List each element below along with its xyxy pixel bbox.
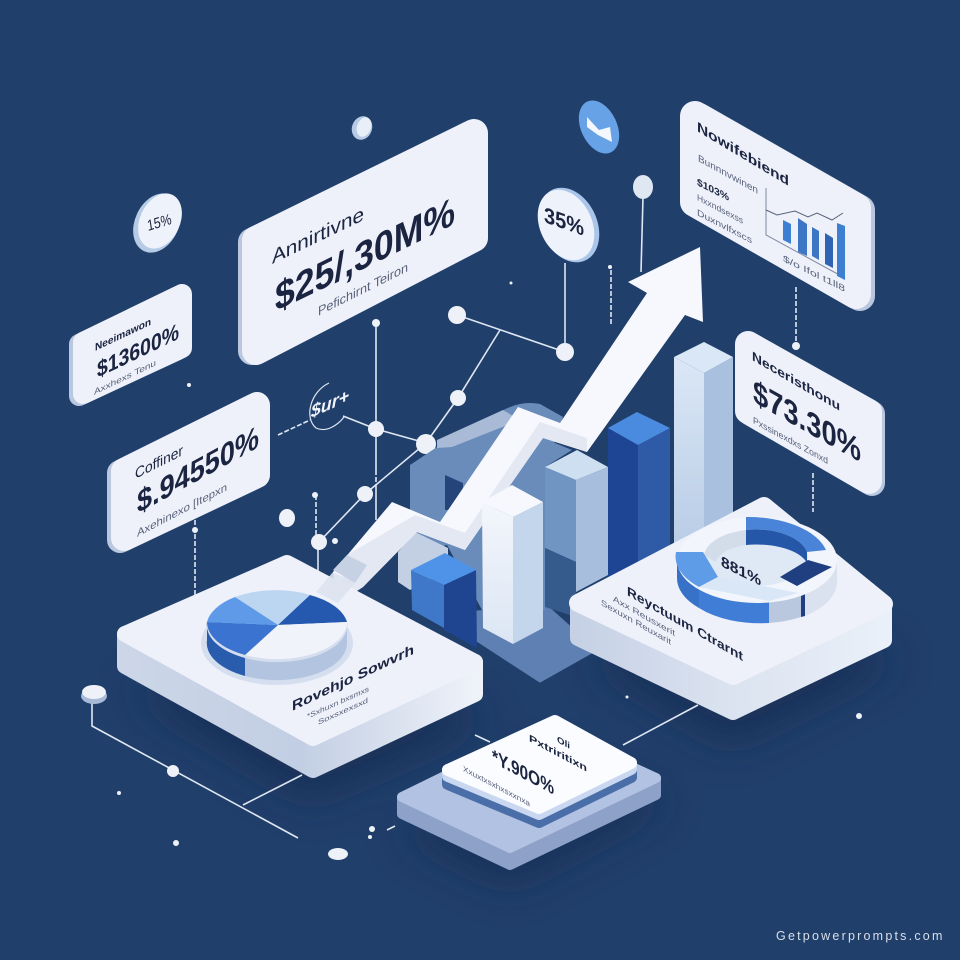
- donut chart: [676, 517, 837, 623]
- bar: medium light: [545, 450, 608, 617]
- panel: right platform: [578, 506, 884, 712]
- panel: bottom platform: [402, 721, 656, 865]
- platform heading: Rovehjo Sowvrh: [292, 642, 414, 715]
- card value: $.94550%: [137, 419, 259, 521]
- bar: white front: [482, 485, 543, 644]
- background building: [410, 403, 572, 610]
- bottom stat card: [448, 721, 631, 822]
- chart labels: $/o Ifol t1ll8: [783, 253, 845, 295]
- badge: 15 percent: 15%: [146, 211, 173, 235]
- card value: $25/,30M%: [275, 188, 455, 321]
- right platform subtext: Axx Reusxerit: [613, 594, 675, 638]
- card: top right with mini chart: [695, 116, 860, 296]
- card note: Axxhexs Tenu: [94, 358, 156, 397]
- bar base platform: [477, 607, 595, 681]
- panel: left platform: [125, 563, 475, 770]
- pie chart: [201, 590, 353, 685]
- bar: tall light: [674, 342, 733, 545]
- bar: small blue cube: [411, 553, 477, 648]
- left platform subtext: *Sxhuxn bxsmxs: [307, 684, 369, 721]
- growth arrow: [333, 247, 703, 603]
- right platform subtext: Sexuxn Reuxarit: [601, 598, 671, 647]
- network nodes: [117, 265, 862, 846]
- card note one: Hxxndsexss: [697, 192, 743, 227]
- platform shadows: [130, 600, 900, 885]
- card note two: Duxnvlfxscs: [697, 207, 752, 247]
- mini bar chart: [766, 188, 845, 280]
- donut value: 881%: [721, 554, 761, 590]
- card: right stat: [748, 344, 872, 483]
- card subtitle: Bunnnvwinen: [698, 153, 758, 197]
- left platform subtext: Soxsxexsxd: [318, 696, 368, 727]
- card label: Oli: [557, 735, 570, 752]
- arrow tail: [316, 572, 355, 603]
- badge: small network label: $ur+: [310, 386, 349, 423]
- connector lines: [92, 197, 813, 838]
- card note: Pefichirnt Teiron: [318, 260, 408, 319]
- card stat: $103%: [697, 177, 730, 204]
- badge: 15 percent: [124, 186, 190, 260]
- small pin circle: [633, 175, 653, 199]
- card: annual revenue: [252, 133, 474, 351]
- card note: Xxuxtxsxhxsxxnxa: [463, 764, 530, 809]
- card title: Neceristhonu: [752, 348, 840, 414]
- card title: Pxtriritixn: [529, 733, 587, 775]
- platform heading: Reyctuum Ctrarnt: [627, 583, 743, 664]
- card title: Annirtivne: [272, 203, 364, 269]
- card title: Nowifebiend: [697, 119, 789, 190]
- bar: dark blue: [608, 412, 670, 590]
- arrow lower wall: [398, 532, 448, 590]
- card note: Pxssinexdxs Zonxd: [753, 416, 828, 467]
- icon: blue mail badge: [571, 94, 627, 160]
- badge: 35 percent: [527, 178, 611, 272]
- watermark: Getpowerprompts.com: [776, 929, 943, 943]
- small floating disc: [328, 848, 348, 860]
- card note: Axehinexo [Itepxn: [137, 481, 227, 540]
- card value: *Y.90O%: [492, 746, 554, 800]
- card value: $13600%: [97, 319, 179, 384]
- card title: Neeimawon: [95, 316, 151, 354]
- card: small stat: [79, 294, 182, 397]
- badge: 35 percent: 35%: [544, 202, 584, 241]
- card title: Coffiner: [135, 442, 184, 483]
- card: coffiner: [120, 405, 259, 540]
- card value: $73.30%: [753, 372, 861, 470]
- floating ball: [348, 113, 376, 143]
- cylinder connector: [81, 685, 107, 704]
